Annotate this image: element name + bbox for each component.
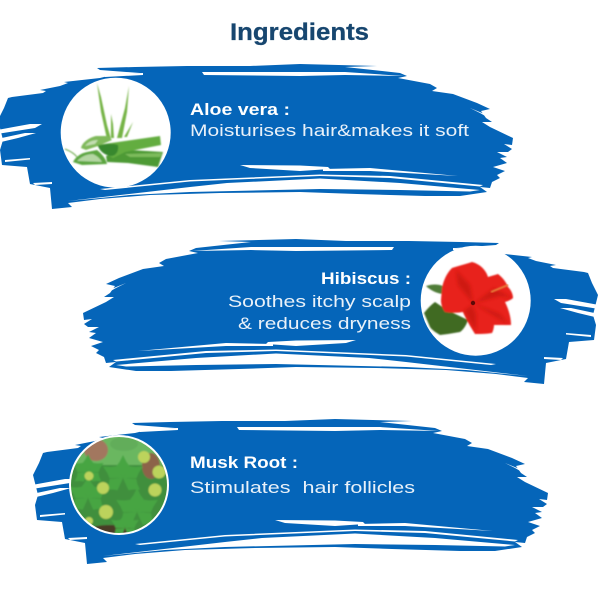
title: Ingredients <box>230 19 369 46</box>
panel: aloe vera <box>0 64 513 209</box>
icon: hibiscus <box>421 246 531 356</box>
brush stroke: musk root <box>32 419 548 564</box>
description: aloe vera: Moisturises hair&makes it soft <box>190 121 469 140</box>
description: musk root: Stimulates hair follicles <box>190 478 415 497</box>
panel: hibiscus <box>83 239 599 384</box>
brush stroke: hibiscus <box>83 239 599 384</box>
description: hibiscus line 2: & reduces dryness <box>238 314 411 333</box>
label: hibiscus: Hibiscus : <box>321 270 411 288</box>
icon: musk root <box>66 435 169 540</box>
label: musk root: Musk Root : <box>190 454 298 472</box>
description: hibiscus line 1: Soothes itchy scalp <box>228 292 411 311</box>
icon: aloe vera <box>61 78 171 188</box>
panel: musk root <box>32 419 548 564</box>
brush stroke: aloe vera <box>0 64 513 209</box>
label: aloe vera: Aloe vera : <box>190 101 290 119</box>
